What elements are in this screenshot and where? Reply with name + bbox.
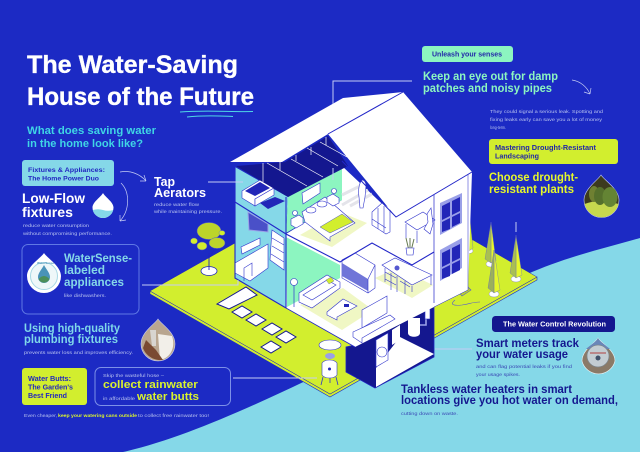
leader line to plants xyxy=(515,222,517,232)
tankless water heaters text: locations give you hot water on demand, xyxy=(401,395,618,407)
subtitle question: in the home look like? xyxy=(27,138,143,150)
panel: WaterSense appliances: appliances xyxy=(64,275,124,289)
low-flow fixtures text xyxy=(22,191,112,237)
panel: water butts label: Water Butts: xyxy=(28,374,71,383)
icon: water drop xyxy=(92,193,114,218)
high-quality plumbing fixtures text: Using high-quality xyxy=(24,323,121,335)
tap aerators text: while maintaining pressure. xyxy=(154,209,222,215)
drought-resistant plants heading xyxy=(489,172,578,196)
leader lines xyxy=(142,81,472,378)
tankless water heaters text xyxy=(401,384,618,417)
leak text xyxy=(490,109,603,131)
panel: water butts label xyxy=(22,368,87,405)
panel: collect rainwater: in affordable xyxy=(103,396,135,402)
arrows from label xyxy=(120,171,146,221)
roof xyxy=(230,92,472,217)
panel: drought-resistant landscaping label: Landscaping xyxy=(495,154,539,160)
smart meters text: and can flag potential leaks if you find xyxy=(476,364,572,370)
damp patches heading xyxy=(423,71,558,95)
low-flow fixtures text: Low-Flow xyxy=(22,191,86,206)
high-quality plumbing fixtures text: plumbing fixtures xyxy=(24,334,118,346)
dining area xyxy=(342,253,433,298)
icon: plumbing photo drop xyxy=(141,319,175,361)
smart meters text: Smart meters track xyxy=(476,338,580,350)
footer note xyxy=(24,413,209,419)
low-flow fixtures text: without compromising performance. xyxy=(23,231,112,237)
panel: collect rainwater: collect rainwater xyxy=(103,379,199,391)
windows on right wall xyxy=(440,193,462,281)
panel: unleash your senses label: Unleash your senses xyxy=(432,52,502,58)
panel: unleash your senses label xyxy=(422,46,513,62)
basement xyxy=(346,303,434,388)
panel: collect rainwater: Skip the wasteful hose – xyxy=(103,373,164,379)
icon: water meter photo drop xyxy=(582,338,615,374)
tap aerators text xyxy=(154,175,222,215)
panel: collect rainwater xyxy=(95,368,230,406)
panel: WaterSense appliances xyxy=(22,244,139,314)
smart meters text: your water usage xyxy=(476,349,568,361)
tap aerators text: Tap xyxy=(154,175,175,189)
kitchen xyxy=(235,212,284,281)
bathtub and rug xyxy=(242,180,285,209)
high-quality plumbing fixtures text xyxy=(24,323,133,356)
arrow to leak text xyxy=(572,80,591,94)
background water curve xyxy=(123,238,640,452)
icon: WaterSense logo: WaterSense xyxy=(37,261,54,265)
bedroom wall xyxy=(286,167,342,233)
water butt xyxy=(319,340,341,385)
title: The Water-Saving xyxy=(27,51,238,79)
panel: fixtures and appliances label: Fixtures & Appliances: xyxy=(28,167,105,174)
damp patches heading: patches and noisy pipes xyxy=(423,83,552,95)
drought-resistant plants heading: Choose drought- xyxy=(489,172,578,184)
upper right room furniture xyxy=(342,180,435,255)
house body xyxy=(235,166,472,347)
high-quality plumbing fixtures text: prevents water loss and improves efficiency. xyxy=(24,350,133,356)
tankless water heaters text: Tankless water heaters in smart xyxy=(401,384,572,396)
living room xyxy=(290,275,395,343)
damp patches heading: Keep an eye out for damp xyxy=(423,71,558,83)
drought-resistant plants heading: resistant plants xyxy=(489,184,574,196)
subtitle question xyxy=(27,125,157,150)
house structural lines xyxy=(235,166,468,347)
tankless water heaters text: cutting down on waste. xyxy=(401,411,458,417)
footer note: Even cheaper, xyxy=(24,413,57,419)
title xyxy=(27,51,254,117)
tree in garden xyxy=(190,222,225,276)
icon: shrubs photo drop xyxy=(584,175,619,218)
panel: water control revolution label xyxy=(492,316,615,332)
footer note: keep your watering cans outside xyxy=(58,413,137,419)
panel: water butts label: Best Friend xyxy=(28,391,67,400)
lower living room wall xyxy=(286,237,340,307)
title: House of the Future xyxy=(27,83,254,111)
panel: drought-resistant landscaping label xyxy=(489,139,618,164)
bathroom wall xyxy=(235,167,288,234)
panel: collect rainwater: water butts xyxy=(136,391,199,403)
smart meters text: your usage spikes. xyxy=(476,372,520,378)
yellow ground plate xyxy=(150,240,537,397)
panel: water control revolution label: The Water Control Revolution xyxy=(503,322,606,328)
panel: water butts label: The Garden's xyxy=(28,382,73,392)
panel: WaterSense appliances: labeled xyxy=(64,263,105,277)
panel: fixtures and appliances label: The Home Power Duo xyxy=(28,176,99,182)
leak text: long-term. xyxy=(490,125,506,131)
low-flow fixtures text: fixtures xyxy=(22,205,73,220)
leak text: fixing leaks early can save you a lot of money xyxy=(490,117,603,123)
panel: fixtures and appliances label xyxy=(22,160,114,186)
footer note: to collect free rainwater too! xyxy=(138,413,209,419)
subtitle question: What does saving water xyxy=(27,125,157,137)
smart meters text xyxy=(476,338,580,378)
tap aerators text: reduce water flow xyxy=(154,202,200,208)
stepping stones xyxy=(217,287,296,353)
bedroom xyxy=(291,183,367,247)
kitchen wall xyxy=(235,202,286,308)
panel: WaterSense appliances: WaterSense- xyxy=(64,251,132,265)
garden hose and tap xyxy=(451,279,480,305)
panel: WaterSense appliances: like dishwashers. xyxy=(64,293,106,299)
panel: drought-resistant landscaping label: Mastering Drought-Resistant xyxy=(495,145,597,152)
attic underside xyxy=(236,136,348,197)
conical drought-resistant trees xyxy=(465,210,522,297)
tap aerators text: Aerators xyxy=(154,186,206,200)
low-flow fixtures text: reduce water consumption xyxy=(23,223,89,229)
leak text: They could signal a serious leak. Spotting and xyxy=(490,109,603,115)
